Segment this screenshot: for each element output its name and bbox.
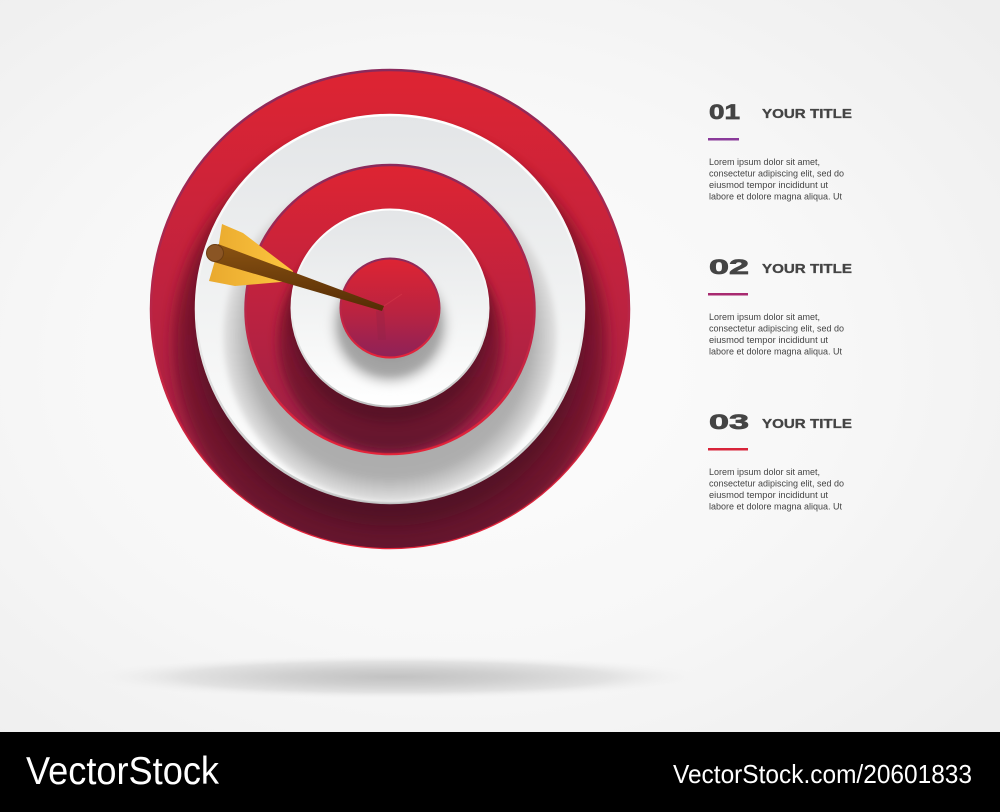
item 02 [708, 256, 852, 356]
arrow fletching [209, 224, 293, 286]
title 01: YOUR TITLE [762, 107, 852, 121]
body 03: Lorem ipsum dolor sit amet, [709, 467, 820, 477]
body 02: consectetur adipiscing elit, sed do [709, 324, 844, 334]
arrow shaft [214, 244, 384, 311]
body 02: labore et dolore magna aliqua. Ut [709, 346, 842, 356]
watermark logo: VectorStock [26, 750, 219, 793]
watermark url: VectorStock.com/20601833 [673, 759, 972, 789]
body 03: labore et dolore magna aliqua. Ut [709, 502, 842, 512]
title 03: YOUR TITLE [762, 417, 852, 431]
outer red ring [151, 70, 629, 561]
body 02: Lorem ipsum dolor sit amet, [709, 312, 820, 322]
body 02: eiusmod tempor incididunt ut [709, 335, 829, 345]
number 01: 01 [709, 101, 740, 124]
item 01 [708, 101, 852, 202]
number 02: 02 [709, 256, 749, 279]
body 01: eiusmod tempor incididunt ut [709, 180, 829, 190]
inner red ring [246, 165, 534, 454]
watermark bar [0, 732, 1000, 812]
divider 02 [708, 293, 748, 296]
title 02: YOUR TITLE [762, 262, 852, 276]
divider 03 [708, 448, 748, 450]
outer white ring [196, 115, 584, 503]
ground shadow [87, 655, 703, 699]
body 01: consectetur adipiscing elit, sed do [709, 168, 844, 178]
body 03: eiusmod tempor incididunt ut [709, 490, 829, 500]
inner white ring [292, 210, 488, 406]
arrow nock [206, 244, 224, 262]
target [151, 70, 629, 561]
number 03: 03 [709, 411, 749, 434]
item 03 [708, 411, 852, 512]
body 01: Lorem ipsum dolor sit amet, [709, 157, 820, 167]
body 03: consectetur adipiscing elit, sed do [709, 478, 844, 488]
divider 01 [708, 138, 739, 140]
body 01: labore et dolore magna aliqua. Ut [709, 192, 842, 202]
arrow [206, 224, 384, 311]
bullseye [340, 258, 440, 358]
